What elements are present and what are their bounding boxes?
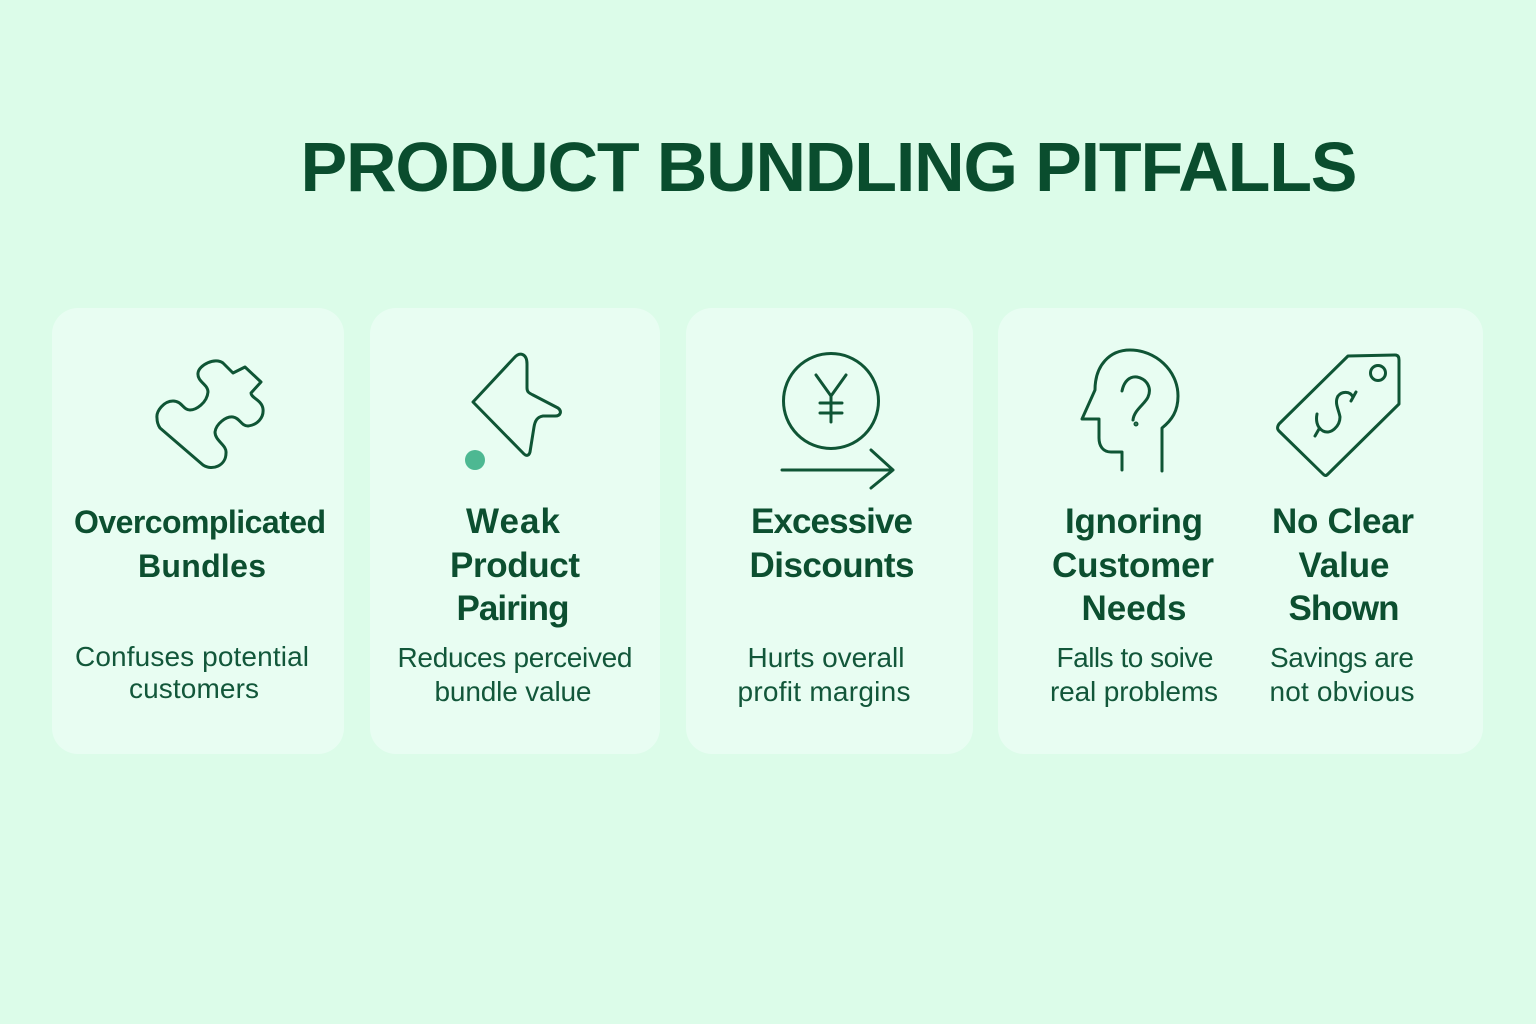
panel: customer needs and value	[998, 308, 1483, 754]
icon: broken shape	[473, 354, 560, 455]
panel: overcomplicated bundles	[52, 308, 344, 754]
icon: price tag with dollar sign	[1278, 355, 1399, 476]
heading: weak product pairing: Weak	[466, 502, 561, 541]
text: confuses potential customers: customers	[129, 673, 259, 704]
heading: weak product pairing: Pairing	[456, 589, 570, 628]
panel: excessive discounts	[686, 308, 973, 754]
text: savings are not obvious: not obvious	[1270, 676, 1414, 707]
panel: weak product pairing	[370, 308, 660, 754]
heading: no clear value shown: Value	[1298, 546, 1390, 585]
heading: excessive discounts: Excessive	[751, 502, 913, 541]
heading: weak product pairing: Product	[450, 546, 580, 585]
heading: ignoring customer needs: Ignoring	[1065, 502, 1203, 541]
title: PRODUCT BUNDLING PITFALLS	[300, 128, 1358, 206]
text: falls to solve real problems: Falls to soive	[1056, 642, 1214, 673]
heading: overcomplicated bundles: Overcomplicated	[74, 504, 326, 540]
heading: no clear value shown: No Clear	[1272, 502, 1414, 541]
heading: excessive discounts: Discounts	[750, 546, 914, 585]
heading: ignoring customer needs: Customer	[1052, 546, 1214, 585]
heading: ignoring customer needs: Needs	[1082, 589, 1186, 628]
heading: no clear value shown: Shown	[1288, 589, 1400, 628]
text: reduces perceived bundle value: bundle value	[434, 676, 592, 707]
icon: yen coin with arrow	[782, 354, 893, 488]
heading: overcomplicated bundles: Bundles	[138, 548, 266, 584]
text: savings are not obvious: Savings are	[1270, 642, 1414, 673]
icon: teal dot	[465, 450, 485, 470]
text: confuses potential customers: Confuses potential	[75, 641, 309, 672]
icon: head with question mark	[1082, 350, 1178, 471]
text: reduces perceived bundle value: Reduces perceived	[398, 642, 632, 673]
text: hurts overall profit margins: Hurts overall	[748, 642, 904, 673]
icon: puzzle piece	[157, 361, 263, 468]
text: hurts overall profit margins: profit margins	[738, 676, 910, 707]
text: falls to solve real problems: real problems	[1050, 676, 1218, 707]
